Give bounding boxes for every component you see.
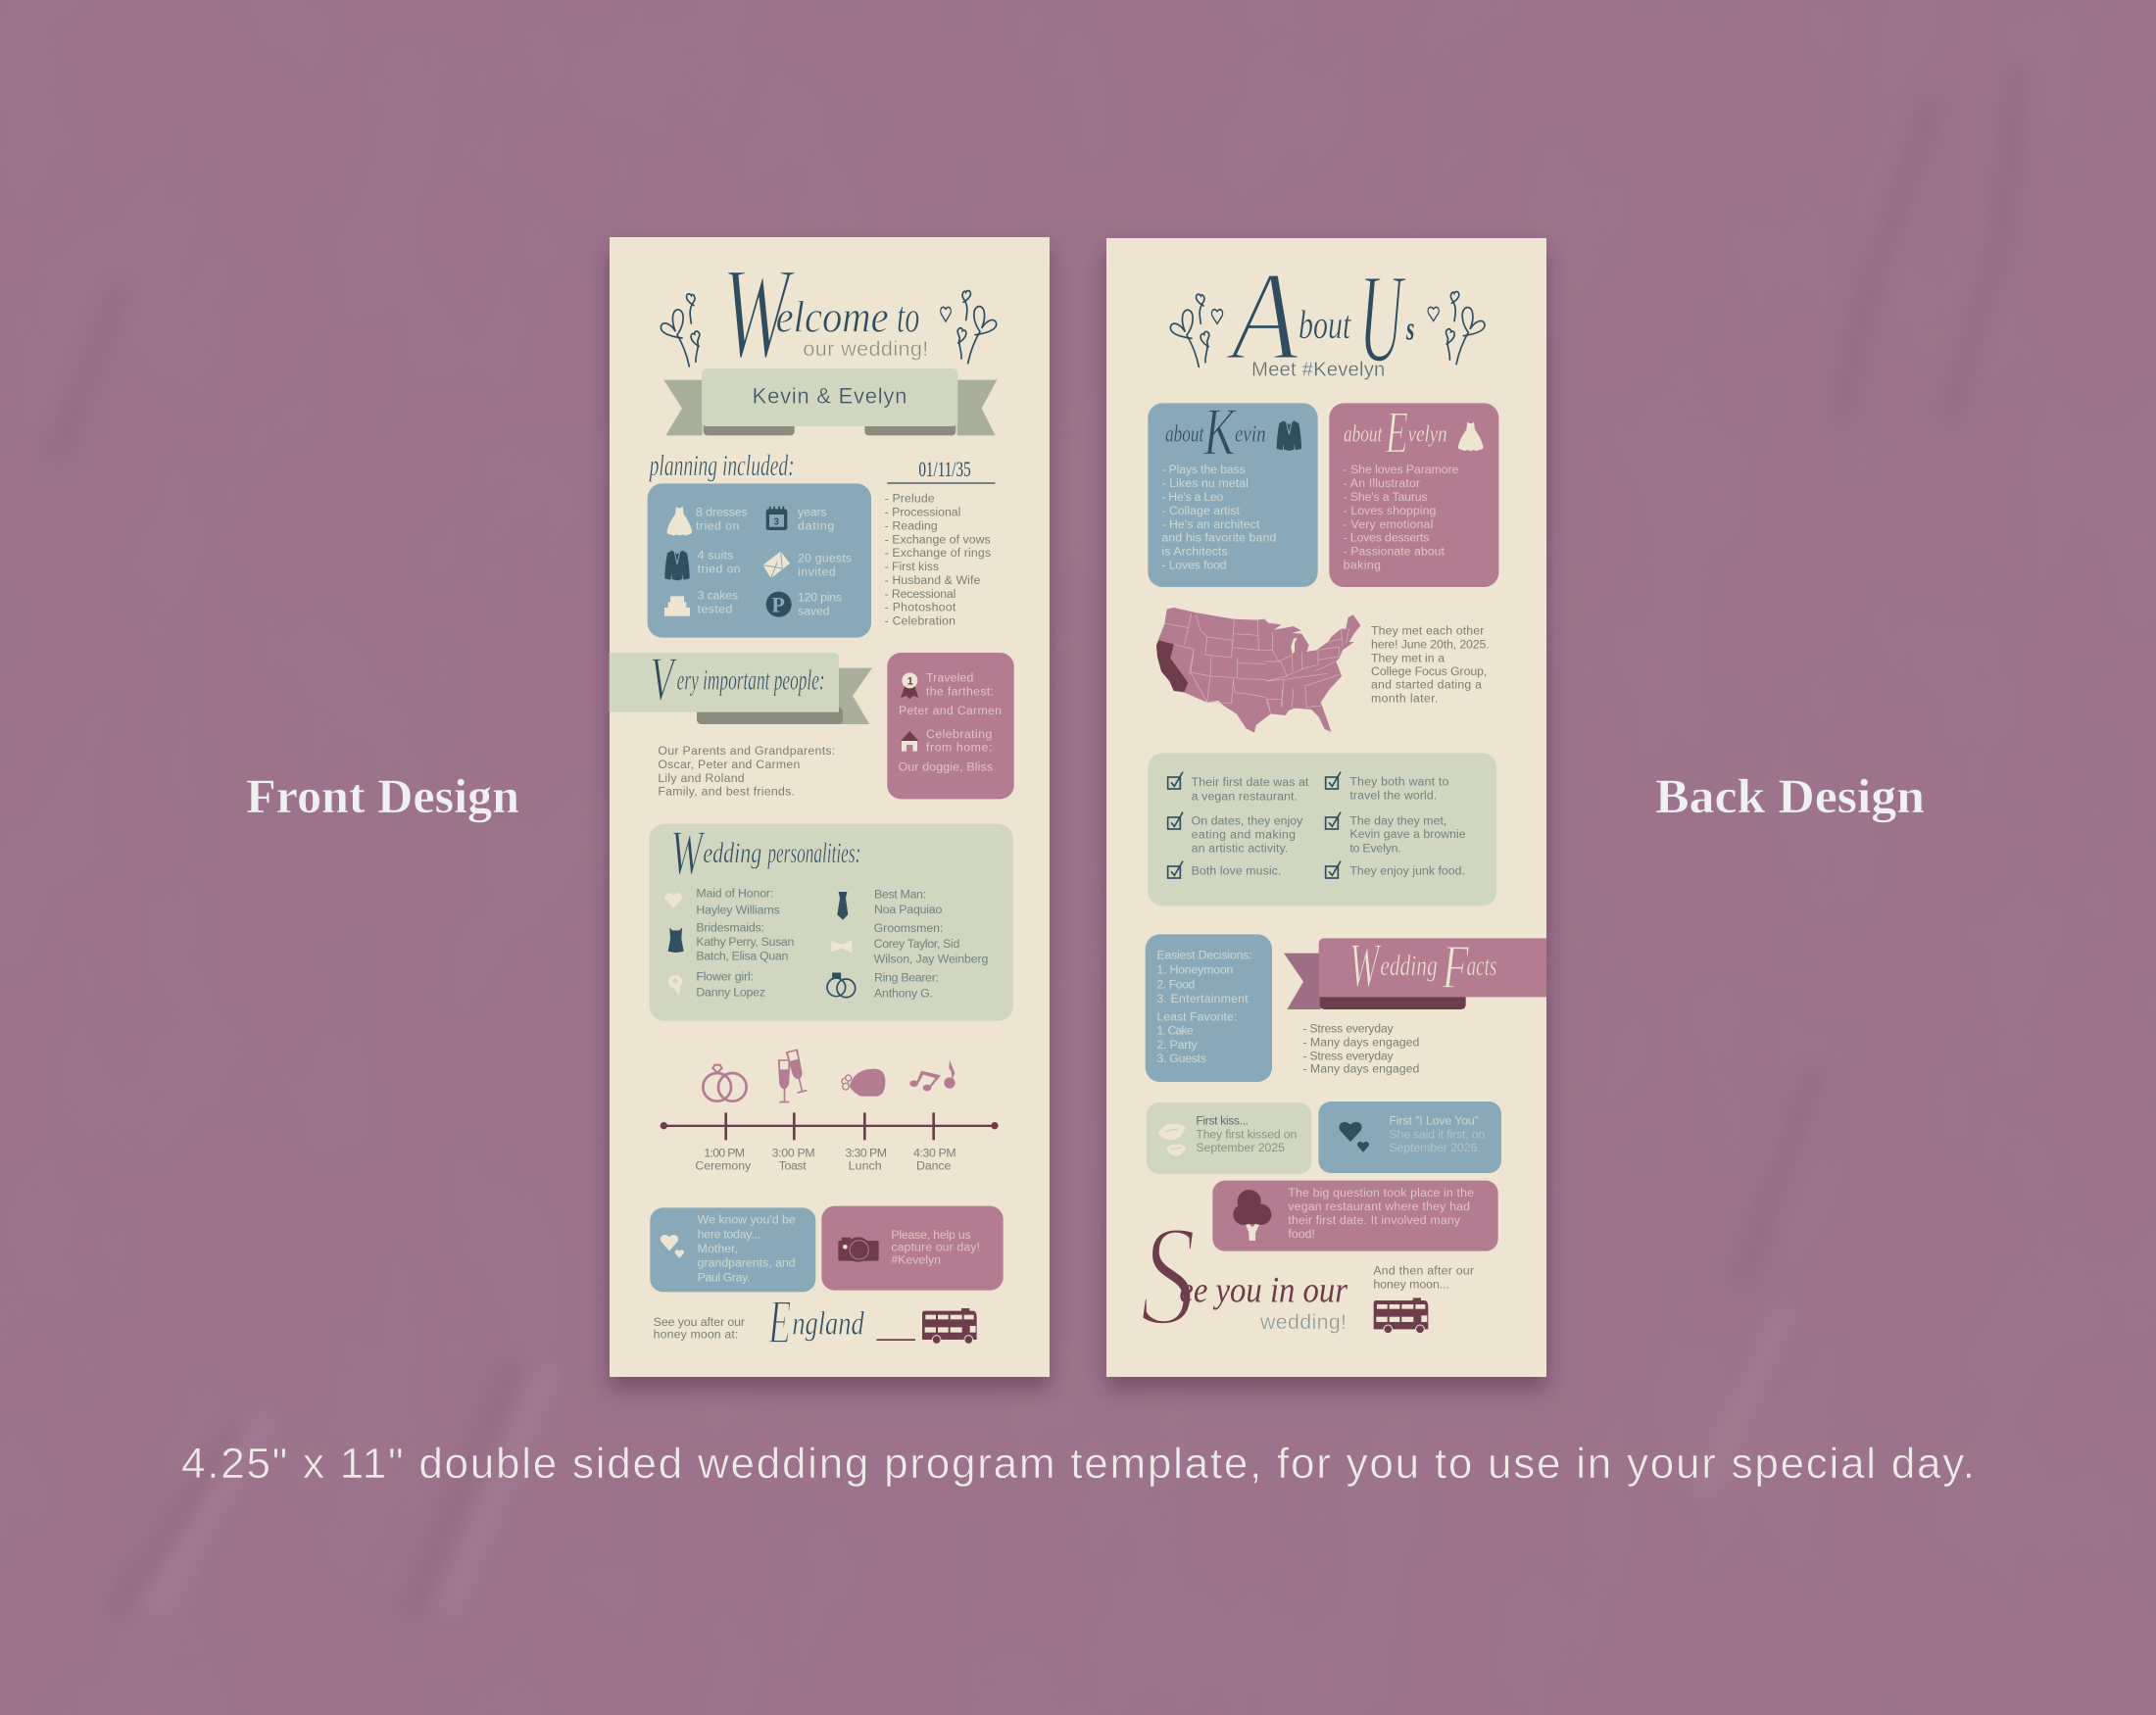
title: Welcome to: W — [722, 240, 796, 385]
list: Kevin facts: and his favorite band — [1161, 531, 1276, 545]
icon: envelope — [762, 552, 790, 578]
list: Kevin facts: - Likes nu metal — [1161, 476, 1249, 490]
text: the big question: The big question took place in the — [1288, 1186, 1474, 1200]
icon: medal: 1 — [907, 675, 913, 687]
panel: shared facts checklist — [1148, 753, 1496, 906]
chart: USA map with California highlighted — [1156, 608, 1360, 733]
text: message — [698, 1213, 796, 1284]
stat: guests: invited — [798, 564, 836, 578]
list: Evelyn facts: - Loves shopping — [1344, 504, 1436, 517]
list: Evelyn facts: - She loves Paramore — [1344, 463, 1458, 476]
text: right checklist — [1349, 775, 1466, 878]
text: see you after: honey moon at: — [654, 1328, 738, 1342]
text: groom's party: Noa Paquiao — [874, 903, 942, 916]
text: left checklist: On dates, they enjoy — [1192, 814, 1303, 828]
list: Evelyn facts: - An Illustrator — [1344, 476, 1420, 490]
panel: decisions — [1146, 934, 1272, 1082]
text: ceremony order list: - Husband & Wife — [885, 573, 980, 587]
panel: back card — [1106, 238, 1546, 1377]
heading: wedding personalities: personalities: — [766, 838, 860, 869]
icon: bridesmaid dress — [668, 928, 684, 953]
list: Kevin facts: - Collage artist — [1161, 504, 1241, 517]
text: celebrating from home — [899, 727, 993, 774]
ribbon: very important people: ery important people: — [677, 664, 825, 696]
icon: pinterest — [766, 592, 792, 617]
stat: cakes: 3 cakes — [698, 589, 738, 603]
script: See you in our wedding: S — [1140, 1197, 1197, 1355]
heading: about Kevin — [1165, 394, 1266, 468]
line — [876, 1339, 915, 1341]
date — [887, 457, 995, 484]
text: celebrating from home: Our doggie, Bliss — [899, 760, 993, 774]
text: they met: They met each other — [1371, 623, 1484, 637]
icon: champagne glasses — [778, 1050, 808, 1102]
stat: dresses: 8 dresses — [696, 506, 748, 519]
ribbon: Wedding Facts — [1284, 932, 1546, 1009]
text: ceremony order list: - Photoshoot — [885, 600, 956, 613]
icon: suit — [1277, 420, 1301, 451]
chart: timeline: 3:30 PM — [845, 1147, 887, 1160]
list: Kevin facts: - Loves food — [1161, 559, 1227, 572]
title: Welcome to: elcome — [776, 292, 889, 341]
text: right checklist: to Evelyn. — [1349, 841, 1401, 855]
stat: dresses — [696, 506, 748, 533]
text: first kiss: They first kissed on — [1196, 1127, 1297, 1141]
text: first I love you: She said it first, on — [1389, 1127, 1485, 1141]
callout: capture our day — [821, 1206, 1004, 1291]
text: bride's party: Maid of Honor: — [696, 887, 773, 901]
list: Evelyn facts: - Loves desserts — [1344, 531, 1429, 545]
text: see you after: See you after our — [654, 1315, 745, 1329]
text: message — [891, 1228, 980, 1267]
heading: about Kevin: about — [1165, 421, 1204, 448]
text: ceremony order list: - Prelude — [885, 492, 935, 506]
text: ceremony order list: - Exchange of vows — [885, 533, 991, 547]
ribbon: very important people: V — [650, 646, 678, 713]
stat: pins: saved — [798, 604, 830, 617]
text: see you after — [654, 1315, 745, 1342]
title: About Us: U — [1359, 249, 1407, 390]
chart: timeline: 3:00 PM — [772, 1147, 815, 1160]
list: Evelyn facts — [1344, 463, 1458, 572]
icon: heart — [665, 893, 682, 908]
icon: house — [901, 731, 918, 752]
text: they met: here! June 20th, 2025. — [1371, 637, 1490, 651]
text: groom's party: Ring Bearer: — [874, 971, 939, 985]
chart: timeline: 4:30 PM — [913, 1147, 956, 1160]
stat: suits: 4 suits — [698, 549, 733, 563]
text: ceremony order list — [885, 492, 991, 627]
ribbon: Kevin & Evelyn — [663, 368, 997, 435]
stat: suits: tried on — [698, 563, 741, 576]
heading: about Evelyn: about — [1344, 421, 1383, 448]
text: the big question — [1288, 1186, 1474, 1241]
list: Evelyn facts: - Passionate about — [1344, 545, 1446, 559]
label: Front Design: Front Design — [246, 768, 519, 823]
text: celebrating from home: from home: — [926, 740, 992, 754]
icon: bow tie — [831, 940, 852, 953]
panel: decisions: 3. Guests — [1156, 1052, 1206, 1065]
callout: first I love you — [1318, 1102, 1501, 1173]
text: groom's party: Corey Taylor, Sid — [874, 937, 959, 951]
panel: decisions: Easiest Decisions: — [1156, 948, 1252, 961]
text: the big question: food! — [1288, 1227, 1315, 1241]
list: Evelyn facts: - Very emotional — [1344, 517, 1433, 531]
icon: bus — [1374, 1298, 1428, 1334]
text: first I love you — [1389, 1113, 1485, 1154]
title: Welcome to: to — [897, 292, 919, 341]
heading: wedding personalities: edding — [703, 838, 761, 869]
text: message: #Kevelyn — [891, 1253, 941, 1267]
icon: rings — [827, 973, 856, 998]
icon: dress — [1458, 421, 1483, 451]
icon: flower — [668, 975, 682, 997]
text: they met: and started dating a — [1371, 678, 1482, 692]
ribbon: very important people — [610, 646, 872, 724]
icon: camera — [838, 1237, 879, 1262]
script: See you in our wedding: ee you in our — [1179, 1270, 1348, 1310]
text: right checklist: They both want to — [1349, 775, 1448, 789]
text: first kiss: September 2025 — [1196, 1141, 1285, 1154]
list: wedding facts: - Stress everyday — [1302, 1049, 1394, 1062]
chart: timeline: Lunch — [849, 1159, 882, 1173]
script: England: E — [767, 1288, 791, 1357]
stat: years dating: dating — [798, 519, 834, 533]
stat: years dating: years — [798, 506, 827, 519]
icon: tree — [1233, 1190, 1271, 1241]
text: ceremony order list: - Exchange of rings — [885, 546, 991, 560]
icon: ceremony rings — [703, 1065, 747, 1102]
text: parents and grandparents: Family, and best friends. — [658, 784, 795, 798]
icon: lips — [1158, 1124, 1186, 1155]
text: ceremony order list: - Processional — [885, 506, 960, 519]
label: Back Design: Back Design — [1655, 768, 1925, 823]
ribbon: Wedding Facts: edding — [1380, 951, 1438, 982]
chart: timeline — [661, 1112, 999, 1173]
text: bride's party — [696, 887, 794, 999]
title: About Us: s — [1405, 312, 1414, 348]
list: wedding facts: - Many days engaged — [1302, 1035, 1419, 1049]
text: bride's party: Danny Lopez — [696, 985, 765, 999]
stat: pins — [798, 590, 842, 617]
panel: decisions: 1. Cake — [1156, 1024, 1194, 1038]
icon: hearts — [1339, 1122, 1369, 1152]
list: Kevin facts — [1161, 463, 1276, 572]
text: they met: month later. — [1371, 692, 1438, 706]
text: bride's party: Flower girl: — [696, 970, 754, 984]
text: bride's party: Kathy Perry, Susan — [696, 935, 794, 949]
text: traveled the farthest — [899, 670, 1002, 717]
stat: cakes — [698, 589, 738, 616]
panel: decisions: 3. Entertainment — [1156, 992, 1249, 1005]
stat: pins: 120 pins — [798, 590, 842, 604]
caption: 4.25" x 11" double sided wedding program template, for you to use in your special day. — [181, 1440, 1975, 1488]
ribbon: Wedding Facts: F — [1442, 932, 1469, 1001]
list: Kevin facts: - He's a Leo — [1161, 490, 1223, 504]
list: Evelyn facts: baking — [1344, 559, 1381, 572]
text: they met — [1371, 623, 1490, 706]
list: Evelyn facts: - She's a Taurus — [1344, 490, 1428, 504]
icon: dress — [667, 507, 692, 535]
text: left checklist: an artistic activity. — [1192, 842, 1288, 856]
heading: wedding personalities — [670, 816, 860, 888]
heading: about Evelyn: velyn — [1408, 421, 1447, 448]
text: left checklist: Their first date was at — [1192, 775, 1309, 789]
text: left checklist: Both love music. — [1192, 864, 1281, 878]
list: wedding facts: - Many days engaged — [1302, 1062, 1419, 1076]
list: wedding facts — [1302, 1021, 1419, 1076]
text: groom's party: Anthony G. — [874, 986, 933, 1000]
text: the big question: their first date. It involved many — [1288, 1213, 1461, 1227]
icon: right heart flowers — [1428, 292, 1485, 365]
panel: about Kevin — [1148, 394, 1318, 587]
panel: decisions: 1. Honeymoon — [1156, 962, 1233, 976]
callout: first kiss — [1147, 1102, 1311, 1174]
text: honeymoon note: honey moon... — [1373, 1278, 1449, 1292]
heading: planning included: planning included: — [648, 449, 795, 482]
text: bride's party: Batch, Elisa Quan — [696, 950, 788, 963]
panel: front card — [610, 237, 1050, 1377]
callout: we know you'd be here — [650, 1207, 815, 1292]
text: message: here today... — [698, 1227, 760, 1241]
heading: about Evelyn: E — [1385, 399, 1408, 466]
icon: calendar: 3 — [773, 516, 779, 527]
text: bride's party: Bridesmaids: — [696, 921, 764, 935]
text: message: grandparents, and — [698, 1256, 796, 1270]
text: left checklist: a vegan restaurant. — [1192, 789, 1298, 803]
icon: cake — [664, 596, 690, 616]
text: groom's party: Best Man: — [874, 887, 926, 901]
ribbon: Wedding Facts: W — [1349, 932, 1383, 1001]
stat: guests: 20 guests — [798, 551, 852, 564]
text: parents and grandparents: Our Parents and Grandparents: — [658, 744, 835, 758]
stat: cakes: tested — [698, 603, 732, 616]
icon: hearts — [661, 1235, 684, 1258]
panel: about Evelyn — [1329, 399, 1498, 587]
text: message: capture our day! — [891, 1241, 980, 1254]
text: left checklist: eating and making — [1192, 828, 1296, 842]
text: right checklist: The day they met, — [1349, 814, 1446, 828]
text: parents and grandparents: Lily and Roland — [658, 771, 745, 785]
text: traveled the farthest: Traveled — [926, 670, 973, 684]
date: 01/11/35 — [918, 457, 971, 481]
icon: suit — [664, 551, 690, 580]
chart: timeline: Ceremony — [695, 1159, 752, 1173]
subtitle: Meet #Kevelyn: Meet #Kevelyn — [1251, 359, 1385, 380]
text: groom's party: Groomsmen: — [874, 921, 943, 935]
script: England: ngland — [792, 1306, 864, 1343]
script: See you in our wedding — [1140, 1197, 1348, 1355]
text: message: Paul Gray. — [698, 1270, 750, 1284]
stat: suits — [698, 549, 741, 576]
icons: checkboxes — [1168, 772, 1341, 878]
text: parents and grandparents — [658, 744, 835, 798]
chart: timeline: Toast — [779, 1159, 807, 1173]
heading: about Evelyn — [1344, 399, 1447, 466]
text: first I love you: September 2026. — [1389, 1141, 1481, 1154]
icon: right heart flowers — [941, 291, 997, 364]
text: traveled the farthest: Peter and Carmen — [899, 704, 1002, 717]
text: celebrating from home: Celebrating — [926, 727, 992, 741]
stat: years dating — [798, 506, 834, 533]
text: ceremony order list: - Celebration — [885, 613, 956, 627]
ribbon: Wedding Facts: acts — [1467, 951, 1496, 982]
text: groom's party: Wilson, Jay Weinberg — [874, 953, 988, 966]
icon: roast turkey — [842, 1069, 885, 1097]
title: About Us — [1225, 246, 1414, 390]
panel: planning stats — [648, 483, 871, 638]
text: groom's party — [874, 887, 988, 1000]
list: Kevin facts: - Plays the bass — [1161, 463, 1246, 476]
icon: pinterest: P — [771, 593, 785, 617]
text: message: Mother, — [698, 1242, 738, 1255]
text: right checklist: Kevin gave a brownie — [1349, 827, 1466, 841]
panel: decisions: 2. Food — [1156, 977, 1195, 991]
text: ceremony order list: - Recessional — [885, 587, 956, 601]
stat: guests — [798, 551, 852, 578]
chart: timeline: 1:00 PM — [704, 1147, 745, 1160]
text: traveled the farthest: the farthest: — [926, 684, 994, 698]
script: England — [767, 1288, 864, 1357]
text: first kiss: First kiss... — [1196, 1113, 1249, 1127]
title: Welcome to — [722, 240, 919, 385]
icon: left heart flowers — [661, 294, 700, 367]
icon: bus — [922, 1308, 977, 1344]
script: See you in our wedding: wedding! — [1259, 1310, 1347, 1334]
list: Kevin facts: - He's an architect — [1161, 517, 1260, 531]
text: the big question: vegan restaurant where they had — [1288, 1200, 1470, 1213]
text: first I love you: First "I Love You" — [1389, 1113, 1479, 1127]
list: wedding facts: - Stress everyday — [1302, 1021, 1394, 1035]
text: ceremony order list: - First kiss — [885, 560, 939, 573]
text: honeymoon note: And then after our — [1373, 1264, 1474, 1278]
title: About Us: A — [1225, 246, 1299, 387]
callout: the big question — [1212, 1181, 1498, 1251]
icon: medal — [901, 672, 918, 699]
chart: timeline: Dance — [916, 1159, 951, 1173]
icon: calendar — [766, 507, 787, 530]
text: message: We know you'd be — [698, 1213, 796, 1227]
panel: decisions: 2. Party — [1156, 1038, 1198, 1052]
text: first kiss — [1196, 1113, 1297, 1154]
icon: left heart flowers — [1170, 294, 1223, 367]
icon: tie — [837, 892, 848, 920]
text: they met: College Focus Group, — [1371, 664, 1487, 678]
subtitle: our wedding: our wedding! — [803, 336, 928, 361]
panel: wedding personalities — [650, 816, 1013, 1021]
text: honeymoon note — [1373, 1264, 1474, 1292]
heading: about Kevin: evin — [1235, 421, 1266, 448]
ribbon: Kevin & Evelyn: Kevin & Evelyn — [753, 383, 906, 408]
text: left checklist — [1192, 775, 1309, 878]
heading: wedding personalities: W — [670, 816, 706, 888]
text: message: Please, help us — [891, 1228, 971, 1242]
text: right checklist: travel the world. — [1349, 789, 1437, 803]
text: they met: They met in a — [1371, 651, 1445, 664]
panel: decisions: Least Favorite: — [1156, 1009, 1237, 1023]
list: Kevin facts: is Architects — [1161, 545, 1228, 559]
heading: about Kevin: K — [1203, 394, 1237, 468]
text: bride's party: Hayley Williams — [696, 904, 780, 917]
stat: dresses: tried on — [696, 519, 739, 533]
text: right checklist: They enjoy junk food. — [1349, 864, 1465, 878]
text: ceremony order list: - Reading — [885, 519, 938, 533]
title: About Us: bout — [1298, 303, 1351, 348]
panel: guest awards — [887, 653, 1014, 799]
icon: music notes — [909, 1060, 956, 1091]
text: parents and grandparents: Oscar, Peter and Carmen — [658, 758, 800, 771]
